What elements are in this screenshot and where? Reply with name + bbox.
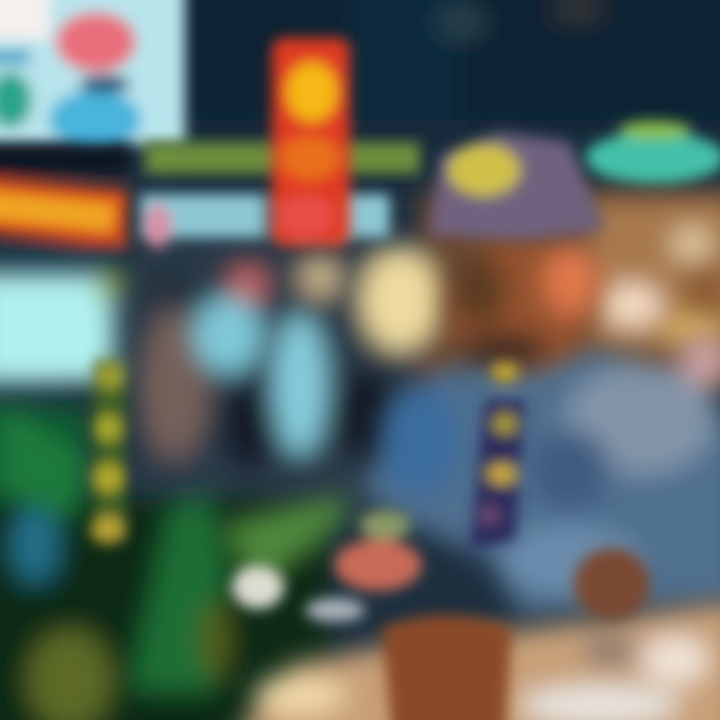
sign: pale blue strip [140,194,390,248]
panel: top left light billboard [0,0,185,150]
figure: man's shirt [360,334,720,615]
figure: man's hand [232,510,422,622]
figure: man's cap [430,132,605,240]
background: dark night sky [170,0,720,200]
panel: dark band and orange sign [0,145,130,264]
background: warm stall at right [590,200,720,350]
object: brown drink cup [382,615,512,720]
sign: green horizontal strip [145,142,420,174]
plant: green leaves in lower left [0,400,350,720]
sign: red and yellow vertical banner [272,38,350,246]
object: brown round bowl [574,548,650,620]
sign: yellow-green vertical dotted strip [90,360,126,544]
panel: pale cyan window [0,267,124,384]
table: cream tabletop and dishes [240,600,720,720]
figure: man's face [448,237,600,373]
sign: teal green oval lamp [585,121,720,184]
background: market crowd and stalls [59,190,720,510]
figure: beaded necklace [470,362,525,550]
